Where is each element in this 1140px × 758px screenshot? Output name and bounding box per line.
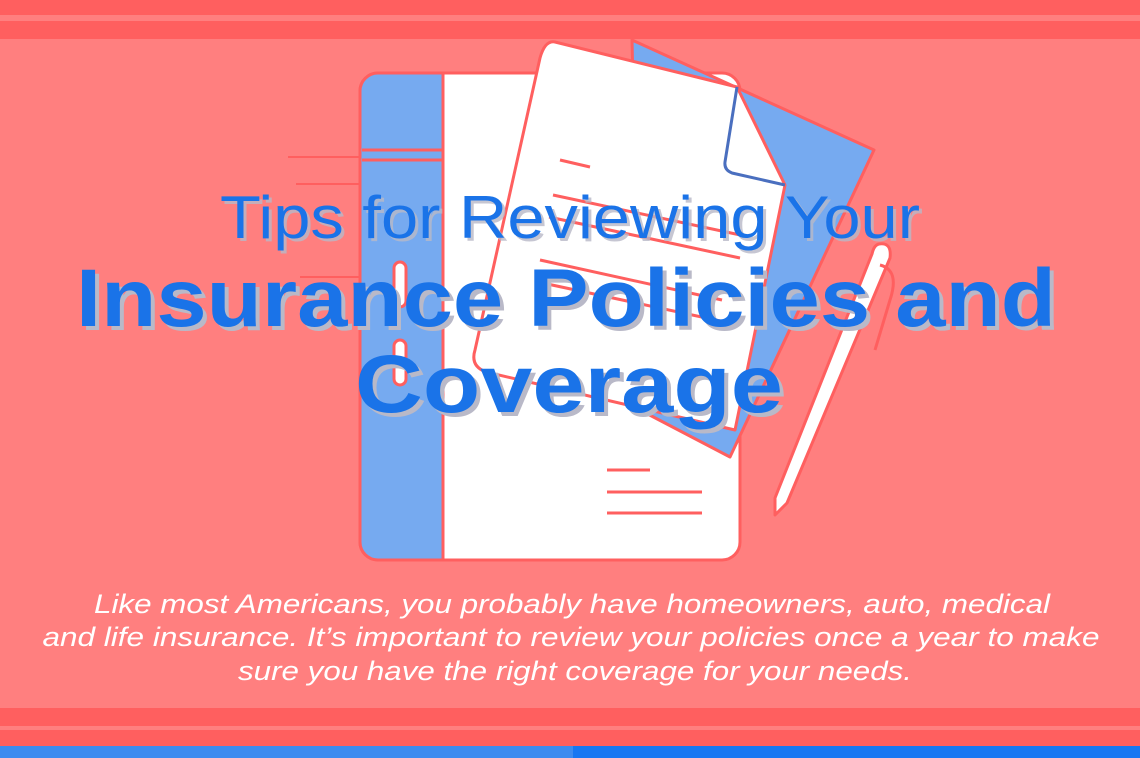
top bars <box>0 0 1140 39</box>
title line 2: Insurance Policies and <box>76 253 1056 344</box>
paper <box>474 42 785 430</box>
bottom bars <box>0 708 1140 758</box>
notebook <box>360 73 740 560</box>
subtitle text: sure you have the right coverage for your needs. <box>238 656 912 686</box>
title line 2: Insurance Policies and <box>80 257 1060 348</box>
title <box>76 184 1060 434</box>
blue folder <box>632 40 874 457</box>
pen <box>775 244 893 515</box>
subtitle text <box>42 589 1100 686</box>
title line 3: Coverage <box>355 339 783 430</box>
title line 1: Tips for Reviewing Your <box>220 184 920 251</box>
speed lines <box>288 157 360 277</box>
title line 3: Coverage <box>359 343 787 434</box>
subtitle text: and life insurance. It’s important to review your policies once a year to make <box>42 622 1100 652</box>
title line 1: Tips for Reviewing Your <box>223 187 923 254</box>
subtitle text: Like most Americans, you probably have homeowners, auto, medical <box>94 589 1051 619</box>
